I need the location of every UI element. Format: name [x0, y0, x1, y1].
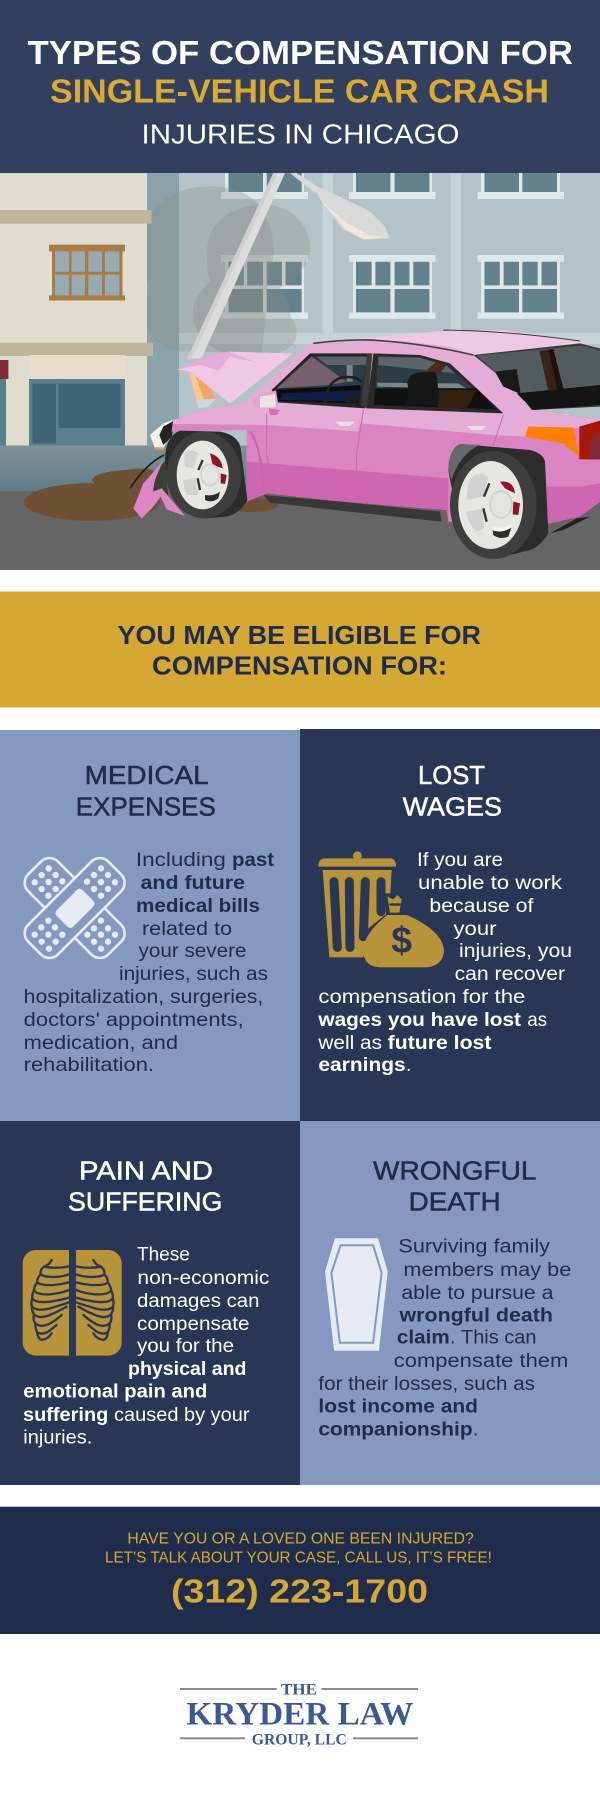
text: medical expenses description: your severe — [138, 941, 246, 962]
rear wheel — [448, 444, 548, 558]
text: lost wages description: compensation for the — [318, 987, 525, 1008]
car — [130, 330, 600, 559]
text: medical expenses description: related to — [142, 919, 232, 940]
text: pain and suffering description: caused by your — [114, 1405, 250, 1426]
tail lights — [525, 427, 579, 457]
hood — [177, 352, 293, 403]
text: pain and suffering description: damages can — [137, 1291, 260, 1312]
text: medical expenses description — [24, 850, 275, 1076]
text: lost wages description: unable to work — [418, 873, 563, 894]
heading: pain and suffering: PAIN AND — [79, 1155, 213, 1185]
text: pain and suffering description: you for the — [137, 1336, 234, 1357]
text: pain and suffering description: compensate — [137, 1314, 250, 1335]
heading: lost wages — [403, 760, 502, 822]
icon: rib cage — [23, 1250, 122, 1356]
sill — [263, 495, 442, 522]
heading: medical expenses: EXPENSES — [76, 792, 216, 822]
text: wrongful death description: This can — [461, 1328, 536, 1349]
banner: eligible for compensation: YOU MAY BE ELIGIBLE FOR — [118, 620, 481, 650]
text: pain and suffering description: physical and — [128, 1359, 246, 1380]
panel: medical expenses — [0, 730, 300, 1121]
panel: wrongful death — [300, 1121, 600, 1485]
front wheel — [165, 431, 247, 518]
rear side window — [367, 353, 503, 413]
text: pain and suffering description: injuries. — [23, 1428, 92, 1449]
text: pain and suffering description: emotional pain and — [23, 1382, 207, 1403]
roof — [347, 330, 600, 355]
heading: wrongful death — [373, 1155, 536, 1216]
text: lost wages description: well as — [317, 1033, 382, 1054]
text: pain and suffering description: non-economic — [137, 1268, 269, 1289]
text: lost wages description: injuries, you — [459, 941, 572, 962]
text: wrongful death description: compensate them — [394, 1351, 568, 1372]
icon: coffin — [325, 1238, 388, 1351]
logo: The Kryder Law Group, LLC: THE — [281, 1681, 317, 1698]
text: wrongful death description: companionship — [318, 1419, 473, 1440]
logo: The Kryder Law Group, LLC: GROUP, LLC — [252, 1731, 347, 1748]
heading: pain and suffering — [68, 1155, 222, 1216]
door lines — [266, 410, 504, 471]
text: wrongful death description: . — [450, 1328, 455, 1349]
text: wrongful death description: lost income and — [318, 1397, 478, 1418]
text: lost wages description: can recover — [455, 964, 566, 985]
panel: pain and suffering — [0, 1121, 300, 1485]
side mirror — [252, 391, 279, 409]
smoke — [139, 186, 310, 355]
building windows — [221, 173, 564, 319]
text: wrongful death description — [318, 1237, 571, 1440]
text: wrongful death description: . — [473, 1419, 478, 1440]
header: title: TYPES OF COMPENSATION FOR — [28, 34, 573, 71]
logo: The Kryder Law Group, LLC: KRYDER LAW — [186, 1696, 413, 1732]
rear quarter window — [473, 343, 600, 410]
text: wrongful death description: able to pursue a — [401, 1283, 554, 1304]
text: wrongful death description: wrongful death — [398, 1306, 553, 1327]
header: title: INJURIES IN CHICAGO — [142, 118, 460, 150]
text: wrongful death description: members may be — [403, 1260, 571, 1281]
heading: medical expenses: MEDICAL — [85, 760, 209, 790]
door pillar — [361, 353, 372, 408]
text: pain and suffering description: suffering — [23, 1405, 108, 1426]
text: pain and suffering description — [23, 1245, 269, 1449]
sidewalk and road — [0, 446, 600, 570]
header: title — [0, 0, 600, 173]
text: medical expenses description: Including — [136, 850, 226, 871]
text: medical expenses description: medication, and — [24, 1033, 178, 1054]
text: wrongful death description: Surviving family — [398, 1237, 551, 1258]
logo: The Kryder Law Group, LLC — [180, 1681, 418, 1748]
text: medical expenses description: rehabilitation. — [24, 1055, 154, 1076]
call to action band — [0, 1507, 600, 1634]
phone number: (312) 223-1700 — [171, 1573, 428, 1610]
car body — [172, 366, 600, 524]
text: medical expenses description: injuries, such as — [119, 964, 268, 985]
call to action band: LET’S TALK ABOUT YOUR CASE, CALL US, IT’S FREE! — [105, 1549, 492, 1566]
header: title: SINGLE-VEHICLE CAR CRASH — [50, 72, 549, 110]
front side window — [272, 353, 372, 408]
call to action band: HAVE YOU OR A LOVED ONE BEEN INJURED? — [127, 1530, 474, 1547]
text: pain and suffering description: These — [137, 1245, 190, 1266]
text: lost wages description: earnings — [318, 1055, 406, 1076]
text: medical expenses description: medical bills — [136, 896, 260, 917]
text: lost wages description: as — [527, 1010, 547, 1031]
banner: eligible for compensation: COMPENSATION FOR: — [152, 650, 447, 680]
beige building — [0, 173, 153, 446]
street lamp — [187, 173, 389, 360]
heading: lost wages: WAGES — [403, 792, 502, 822]
panel: lost wages — [300, 729, 600, 1121]
banner: eligible for compensation — [0, 592, 600, 708]
heading: medical expenses — [76, 760, 216, 822]
text: lost wages description: because of — [429, 896, 534, 917]
text: lost wages description: your — [454, 919, 497, 940]
heading: lost wages: LOST — [418, 760, 485, 790]
text: lost wages description — [317, 850, 572, 1076]
heading: pain and suffering: SUFFERING — [68, 1186, 222, 1216]
illustration: car crashed into a street lamp — [0, 173, 600, 570]
text: lost wages description: future lost — [388, 1033, 492, 1054]
heading: wrongful death: WRONGFUL — [373, 1155, 536, 1185]
door handles — [335, 422, 355, 426]
lamp pole base — [189, 373, 216, 399]
text: medical expenses description: past — [232, 850, 275, 871]
text: medical expenses description: doctors' appointments, — [24, 1010, 244, 1031]
oil puddle — [24, 468, 278, 521]
icon: crossed bandages — [20, 853, 130, 963]
heading: wrongful death: DEATH — [409, 1186, 501, 1216]
text: lost wages description: . — [406, 1055, 411, 1076]
text: lost wages description: If you are — [417, 850, 503, 871]
text: wrongful death description: claim — [397, 1328, 450, 1349]
text: wrongful death description: for their losses, such as — [318, 1374, 535, 1395]
front bumper debris — [150, 419, 175, 448]
text: medical expenses description: hospitalization, surgeries, — [24, 987, 263, 1008]
icon: trash can with money bag: $ — [391, 919, 412, 961]
icon: trash can with money bag — [318, 851, 444, 967]
text: lost wages description: wages you have lost — [317, 1010, 522, 1031]
text: medical expenses description: and future — [140, 873, 245, 894]
